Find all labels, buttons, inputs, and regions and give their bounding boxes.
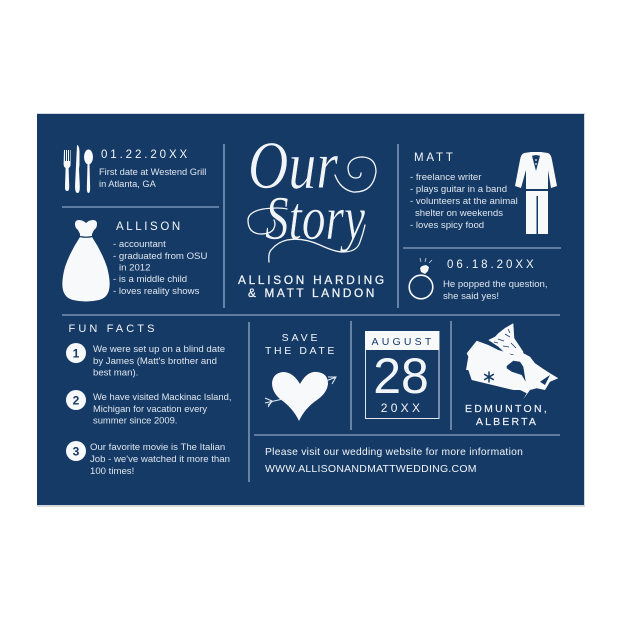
card background xyxy=(37,113,585,507)
Allison list: - loves reality shows xyxy=(113,286,200,297)
couple names: ALLISON HARDING xyxy=(238,273,387,287)
proposal text: He popped the question, xyxy=(443,279,548,290)
save the date heading: SAVE xyxy=(282,332,320,344)
month: AUGUST xyxy=(372,336,434,348)
panel: proposal xyxy=(409,258,548,302)
dress waist xyxy=(80,236,92,238)
fact 2: Michigan for vacation every xyxy=(93,403,207,414)
fact 1: best man). xyxy=(93,368,138,378)
Allison list: - graduated from OSU xyxy=(113,251,207,262)
title flourishes xyxy=(248,157,376,262)
fact 2 xyxy=(66,390,231,426)
fact 3 xyxy=(66,441,230,477)
panel: first date xyxy=(64,145,206,193)
panel: calendar xyxy=(365,331,439,418)
Matt heading: MATT xyxy=(414,152,456,164)
Allison list: in 2012 xyxy=(119,262,150,274)
date heading: 01.22.20XX xyxy=(101,149,190,161)
proposal text: she said yes! xyxy=(443,291,499,302)
year: 20XX xyxy=(381,401,423,415)
title: Our Story xyxy=(238,127,387,300)
icon: wedding dress xyxy=(62,220,110,302)
fact 3: 100 times! xyxy=(90,466,134,477)
panel: fun facts xyxy=(66,323,231,477)
panel: save the date xyxy=(265,332,337,421)
website url: WWW.ALLISONANDMATTWEDDING.COM xyxy=(265,463,477,475)
Allison heading: ALLISON xyxy=(116,221,183,233)
date description: in Atlanta, GA xyxy=(99,179,157,189)
panel: location xyxy=(465,323,558,428)
fact 2: We have visited Mackinac Island, xyxy=(93,391,231,402)
Matt list: - plays guitar in a band xyxy=(410,184,507,195)
panel: Allison xyxy=(62,220,207,302)
fact 1: by James (Matt's brother and xyxy=(93,356,217,367)
fun facts heading: FUN FACTS xyxy=(68,323,158,335)
Matt list: - freelance writer xyxy=(410,172,482,183)
fact 3: 3 xyxy=(73,444,80,458)
location label: EDMUNTON, xyxy=(465,403,549,415)
fact 3: Job - we've watched it more than xyxy=(90,454,230,465)
Matt list: - volunteers at the animal xyxy=(410,196,518,207)
date description: First date at Westend Grill xyxy=(99,167,206,177)
fact 1: 1 xyxy=(73,346,80,360)
fact 2: summer since 2009. xyxy=(93,414,177,426)
Matt list: - loves spicy food xyxy=(410,220,484,231)
title: Our Story: & MATT LANDON xyxy=(248,286,377,300)
Allison list: - is a middle child xyxy=(113,274,187,285)
proposal date: 06.18.20XX xyxy=(447,259,537,271)
website invitation: Please visit our wedding website for more information xyxy=(265,447,523,458)
Matt list: shelter on weekends xyxy=(415,208,503,219)
icon: heart xyxy=(272,372,328,421)
day: 28 xyxy=(373,348,429,404)
icon: map of Canada xyxy=(466,323,558,399)
fact 3: Our favorite movie is The Italian xyxy=(90,442,225,453)
fact 2: 2 xyxy=(73,394,80,408)
title lettering: Our xyxy=(248,127,338,203)
icon: ring xyxy=(409,258,433,299)
icon: cutlery xyxy=(64,145,93,193)
icon: arrow xyxy=(265,377,336,407)
title: Our Story: Story xyxy=(265,185,365,253)
snowflake marker xyxy=(484,372,494,382)
fact 1: We were set up on a blind date xyxy=(93,344,225,355)
panel: website xyxy=(265,447,523,475)
icon: tuxedo xyxy=(515,152,557,234)
panel: save the date: THE DATE xyxy=(265,345,337,357)
fact 1 xyxy=(66,343,225,378)
panel: Matt xyxy=(410,152,557,234)
Allison list: - accountant xyxy=(113,239,166,250)
panel: location: ALBERTA xyxy=(476,416,538,428)
